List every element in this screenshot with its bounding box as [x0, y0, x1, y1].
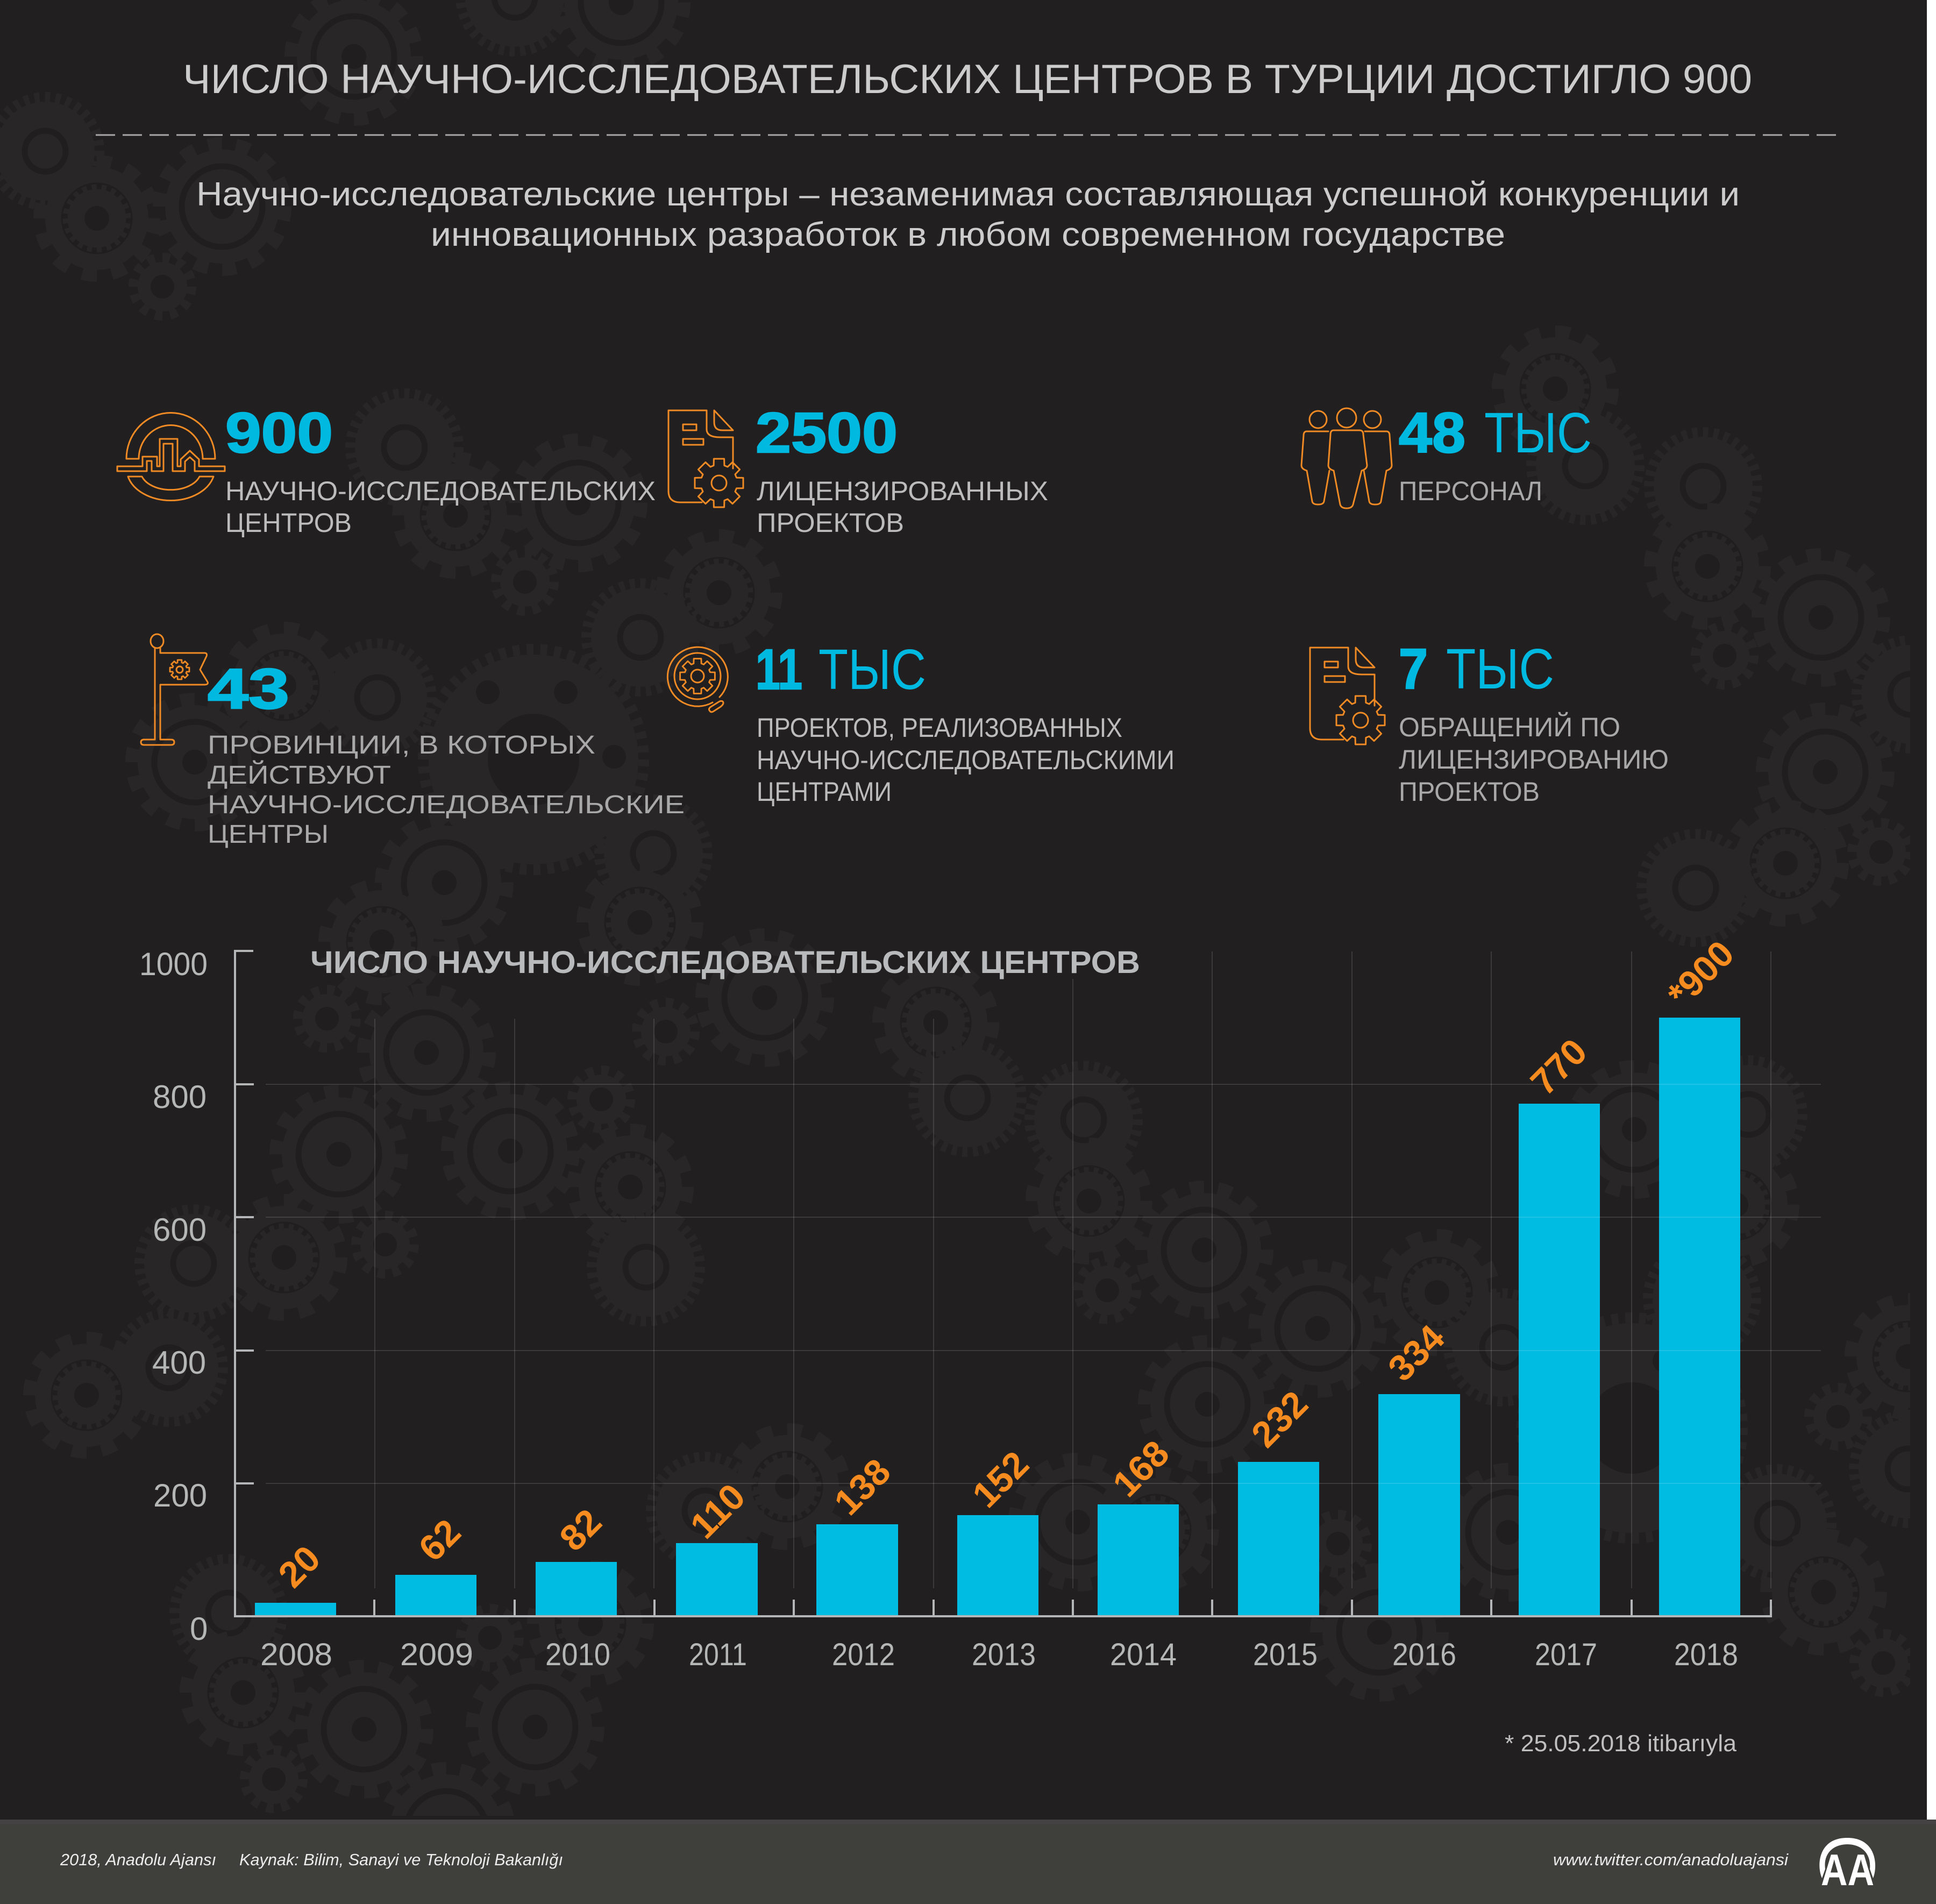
footer link: www.twitter.com/anadoluajansi: [1553, 1850, 1789, 1869]
subtitle: инновационных разработок в любом современном государстве: [431, 216, 1505, 253]
y axis labels: 600: [153, 1212, 207, 1248]
stat: 11 thousand projects: 11: [756, 638, 802, 701]
stat: 43 provinces: [141, 634, 685, 849]
footer credit: 2018, Anadolu Ajansı: [60, 1850, 216, 1869]
y axis labels: [139, 946, 208, 1647]
subtitle: [196, 176, 1740, 253]
stat: 7 thousand applications: ПРОЕКТОВ: [1399, 777, 1540, 807]
bar value labels: 770: [1523, 1031, 1595, 1103]
y axis labels: 800: [153, 1079, 207, 1115]
stat: 43 provinces: ДЕЙСТВУЮТ: [208, 760, 391, 790]
stat: 43 provinces: НАУЧНО-ИССЛЕДОВАТЕЛЬСКИЕ: [208, 791, 685, 819]
bar value labels: 82: [552, 1501, 609, 1559]
stat: 900 research centres: 900: [225, 401, 333, 465]
subtitle: Научно-исследовательские центры – незаменимая составляющая успешной конкуренции и: [196, 176, 1740, 213]
x axis labels: 2009: [400, 1637, 473, 1672]
bar value labels: 138: [827, 1451, 899, 1523]
x axis labels: 2012: [832, 1637, 895, 1672]
bar value labels: 152: [965, 1444, 1037, 1516]
footnote: * 25.05.2018 itibarıyla: [1505, 1730, 1737, 1757]
y axis labels: 0: [190, 1611, 208, 1647]
icon: Anadolu Agency logo: AA: [1821, 1845, 1874, 1895]
axes: [235, 951, 1771, 1616]
stat: 900 research centres: НАУЧНО-ИССЛЕДОВАТЕЛЬСКИХ: [225, 476, 656, 506]
stat: 2500 licensed projects: 2500: [756, 401, 898, 465]
x axis labels: 2016: [1392, 1637, 1456, 1672]
stat: 7 thousand applications: ОБРАЩЕНИЙ ПО: [1399, 712, 1620, 742]
x axis labels: 2017: [1535, 1637, 1597, 1672]
y axis labels: 200: [153, 1477, 207, 1514]
icon: three people: [1301, 408, 1392, 508]
stat: 2500 licensed projects: ПРОЕКТОВ: [757, 508, 904, 538]
x axis labels: 2008: [260, 1637, 332, 1672]
stat: 900 research centres: ЦЕНТРОВ: [225, 508, 352, 538]
x axis labels: 2014: [1110, 1637, 1177, 1672]
x axis labels: 2011: [689, 1637, 747, 1672]
stat: 900 research centres: [117, 401, 656, 538]
stat: 11 thousand projects: ТЫС: [818, 638, 926, 701]
footer bar: [0, 1820, 1936, 1904]
stat: 7 thousand applications: ЛИЦЕНЗИРОВАНИЮ: [1399, 744, 1669, 775]
y axis labels: 1000: [139, 946, 208, 982]
stat: 11 thousand projects: ПРОЕКТОВ, РЕАЛИЗОВАННЫХ: [757, 713, 1122, 743]
x axis labels: 2018: [1674, 1637, 1738, 1672]
stat: 2500 licensed projects: [668, 401, 1048, 538]
x axis labels: [260, 1637, 1738, 1672]
stat: 43 provinces: ЦЕНТРЫ: [208, 820, 329, 849]
stat: 48 thousand personnel: [1301, 401, 1592, 508]
stat: 7 thousand applications: ТЫС: [1446, 637, 1554, 701]
icon: gear in spiral circle: [667, 647, 728, 712]
icon: flag with gear: [141, 634, 208, 745]
stat: 43 provinces: 43: [208, 657, 289, 721]
icon: city in circle: [117, 413, 225, 501]
bar value labels: 232: [1244, 1383, 1316, 1455]
bar value labels: 168: [1105, 1433, 1177, 1505]
stat: 11 thousand projects: ЦЕНТРАМИ: [757, 777, 892, 807]
footer source: Kaynak: Bilim, Sanayi ve Teknoloji Bakanlığı: [239, 1850, 563, 1869]
bars: [255, 1018, 1740, 1616]
bar value labels: [271, 933, 1742, 1595]
stat: 11 thousand projects: НАУЧНО-ИССЛЕДОВАТЕЛЬСКИМИ: [757, 745, 1175, 775]
bar value labels: 20: [271, 1538, 328, 1595]
stat: 48 thousand personnel: ПЕРСОНАЛ: [1399, 476, 1542, 506]
stat: 7 thousand applications: [1310, 637, 1669, 807]
stat: 48 thousand personnel: ТЫС: [1484, 401, 1592, 465]
title: ЧИСЛО НАУЧНО-ИССЛЕДОВАТЕЛЬСКИХ ЦЕНТРОВ В ТУРЦИИ ДОСТИГЛО 900: [183, 56, 1752, 102]
stat: 2500 licensed projects: ЛИЦЕНЗИРОВАННЫХ: [757, 476, 1048, 506]
background: gear pattern: [127, 408, 1876, 1877]
bar value labels: 110: [682, 1476, 753, 1546]
bar value labels: *900: [1660, 933, 1742, 1015]
x axis labels: 2015: [1253, 1637, 1318, 1672]
white right edge strip: [1927, 0, 1936, 1820]
x axis labels: 2010: [545, 1637, 610, 1672]
stat: 11 thousand projects: [667, 638, 1175, 807]
icon: document with gear: [668, 410, 743, 507]
x axis labels: 2013: [972, 1637, 1036, 1672]
stat: 7 thousand applications: 7: [1399, 637, 1428, 701]
bar chart: number of research centres: [139, 933, 1821, 1672]
stat: 43 provinces: ПРОВИНЦИИ, В КОТОРЫХ: [208, 731, 595, 759]
y axis labels: 400: [152, 1345, 206, 1381]
icon: document with gear: [1310, 648, 1385, 744]
bar value labels: 334: [1380, 1317, 1453, 1389]
bar value labels: 62: [411, 1511, 468, 1569]
chart heading: ЧИСЛО НАУЧНО-ИССЛЕДОВАТЕЛЬСКИХ ЦЕНТРОВ: [310, 945, 1140, 980]
stat: 48 thousand personnel: 48: [1399, 401, 1465, 465]
